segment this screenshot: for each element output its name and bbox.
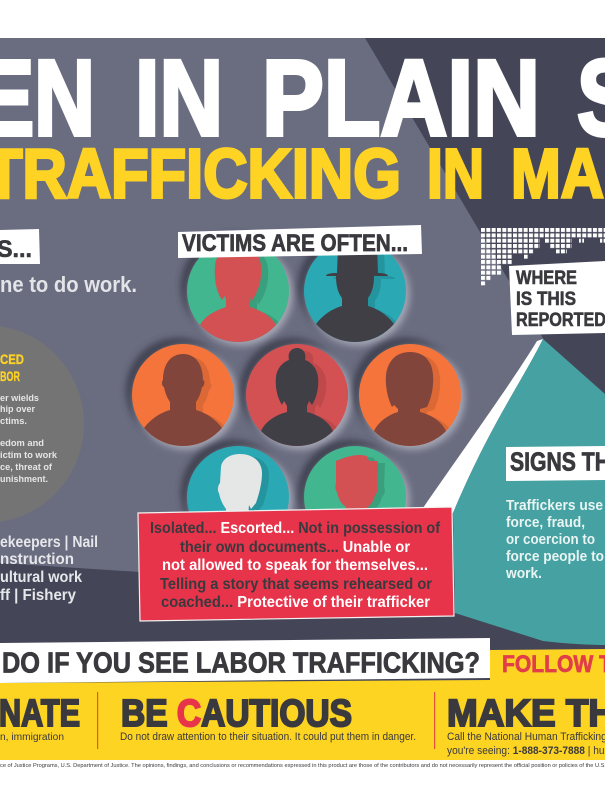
- callout: victim signs red box: their own documents... Unable or: [180, 539, 410, 556]
- text block: industries: ekeepers | Nail: [0, 534, 98, 551]
- panel: left heading and intro: [0, 229, 137, 297]
- divider left: [97, 692, 98, 749]
- headline line 1: IN: [135, 37, 223, 158]
- headline line 1: [0, 37, 605, 158]
- action: nate: n, immigration: [0, 731, 64, 743]
- disclaimer: ce of Justice Programs, U.S. Department of Justice. The opinions, findings, and conclusions or recommendations expressed in this product are those of the contributors and do not necessarily represent the official position or policies of the U.S.: [0, 763, 605, 769]
- panel: forced labor circle: er wields: [0, 393, 39, 404]
- panel: forced labor circle: hip over: [0, 404, 35, 415]
- callout: victim signs red box: coached... Protective of their trafficker: [161, 594, 430, 611]
- panel: forced labor circle: ctims.: [0, 416, 27, 427]
- text block: traffickers use force: [505, 498, 604, 582]
- divider right: [434, 692, 435, 749]
- panel: signs teal: [453, 339, 605, 645]
- panel: forced labor circle: ce, threat of: [0, 462, 53, 473]
- panel: forced labor circle: CED: [0, 352, 24, 367]
- panel: forced labor circle: ictim to work: [0, 450, 58, 461]
- headline line 1: PLAIN: [262, 37, 540, 158]
- text block: industries: nstruction: [0, 551, 74, 568]
- panel: forced labor circle: BOR: [0, 369, 20, 384]
- circle: man in hat: [294, 254, 414, 350]
- heading: victims are often: VICTIMS ARE OFTEN...: [182, 230, 408, 257]
- panel: gray diagonal field: [0, 38, 544, 595]
- world map dots: [481, 228, 605, 286]
- text block: industries: ultural work: [0, 569, 82, 586]
- text block: traffickers use force: work.: [505, 566, 542, 582]
- panel: forced labor circle: edom and: [0, 438, 44, 449]
- headline line 2: IN: [427, 134, 484, 212]
- action: nate: [0, 693, 80, 743]
- text block: traffickers use force: or coercion to: [506, 532, 595, 548]
- circle: woman with bun: [240, 338, 352, 453]
- label: where is this reported: [509, 261, 605, 335]
- text block: industries: [0, 534, 98, 604]
- callout: victim signs red box: Isolated... Escorted... Not in possession of: [150, 520, 441, 537]
- question banner: DO IF YOU SEE LABOR TRAFFICKING?: [2, 648, 480, 680]
- white curved accent: [423, 339, 543, 513]
- yellow footer band: [0, 649, 605, 760]
- question banner: [0, 638, 490, 683]
- callout: victim signs red box: Telling a story that seems rehearsed or: [160, 576, 432, 593]
- circle: woman with bob orange: [353, 338, 465, 453]
- callout: victim signs red box: not allowed to speak for themselves...: [162, 557, 428, 574]
- circle: short-haired person: [178, 437, 296, 512]
- text block: industries: ff | Fishery: [0, 587, 76, 604]
- text block: traffickers use force: force, fraud,: [506, 515, 585, 531]
- label: where is this reported: IS THIS: [516, 288, 576, 310]
- circle: bob-haired woman: [178, 256, 296, 350]
- action: be cautious: Do not draw attention to their situation. It could put them in danger.: [120, 731, 416, 743]
- circle: man silhouette orange: [126, 338, 238, 453]
- panel: left heading and intro: ne to do work.: [0, 272, 137, 297]
- label: where is this reported: WHERE: [516, 267, 577, 289]
- action: nate: NATE: [0, 693, 80, 735]
- action: be cautious: BE CAUTIOUS: [121, 693, 352, 735]
- callout: victim signs red box: [138, 507, 454, 621]
- circle: flat-top person: [294, 437, 414, 510]
- action: make the call: [447, 693, 605, 757]
- panel: forced labor circle: unishment.: [0, 474, 48, 485]
- panel: forced labor circle: [0, 325, 84, 523]
